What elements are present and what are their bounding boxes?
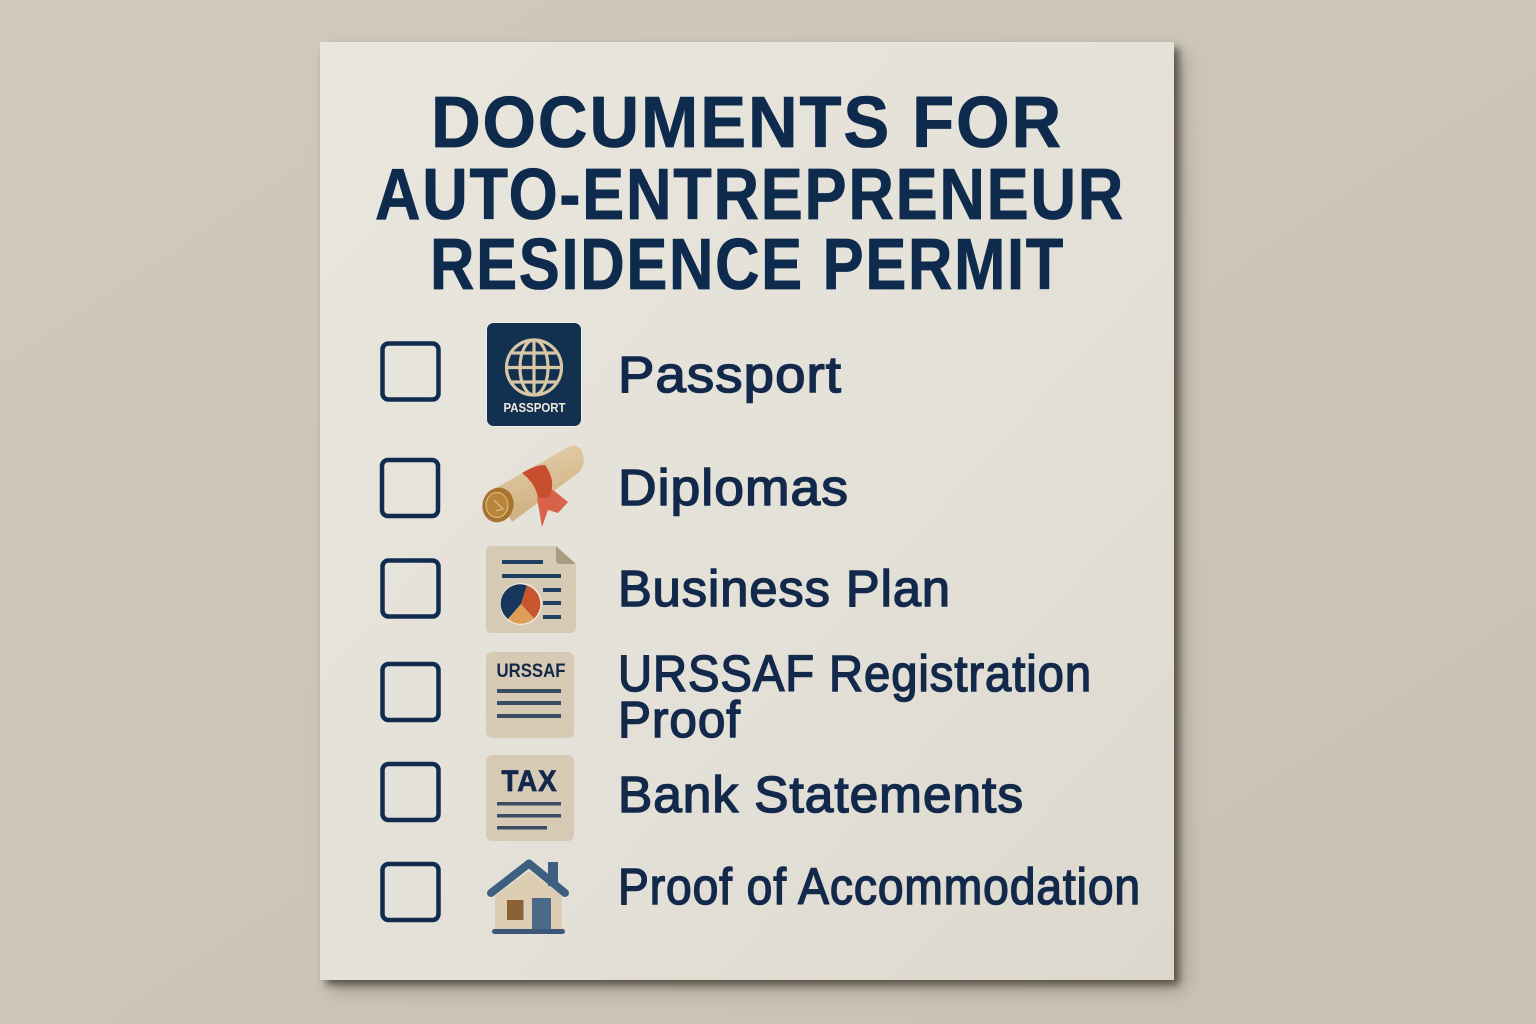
title: AUTO-ENTREPRENEUR: [375, 155, 1125, 235]
checkbox: diplomas: [382, 460, 438, 516]
icon: URSSAF document: [486, 652, 574, 738]
labels: Proof: [618, 691, 741, 748]
title: [375, 83, 1125, 305]
labels: Bank Statements: [618, 766, 1024, 823]
labels: Business Plan: [618, 560, 951, 617]
checkbox: business plan: [382, 560, 438, 616]
labels: Diplomas: [618, 459, 849, 516]
icon: house: [491, 862, 565, 934]
checkbox: URSSAF: [382, 664, 438, 720]
icon: tax document: [486, 755, 574, 841]
title: DOCUMENTS FOR: [431, 83, 1063, 163]
icon: passport: [486, 322, 582, 426]
icon: business plan document: [486, 546, 576, 633]
icon: URSSAF document: URSSAF: [496, 661, 566, 682]
labels: URSSAF Registration: [618, 645, 1092, 702]
icon: diploma scroll: [478, 445, 584, 527]
checkbox: bank statements: [382, 764, 438, 820]
panel: checklist card: [320, 42, 1174, 980]
labels: Proof of Accommodation: [618, 858, 1141, 915]
title: RESIDENCE PERMIT: [430, 225, 1065, 305]
card shadow: [326, 48, 1184, 990]
checkbox: passport: [382, 344, 438, 400]
labels: [618, 346, 1141, 915]
labels: Passport: [618, 346, 842, 403]
icon: passport: PASSPORT: [504, 401, 566, 415]
checkbox: accommodation: [382, 864, 438, 920]
icon: tax document: TAX: [502, 765, 558, 798]
